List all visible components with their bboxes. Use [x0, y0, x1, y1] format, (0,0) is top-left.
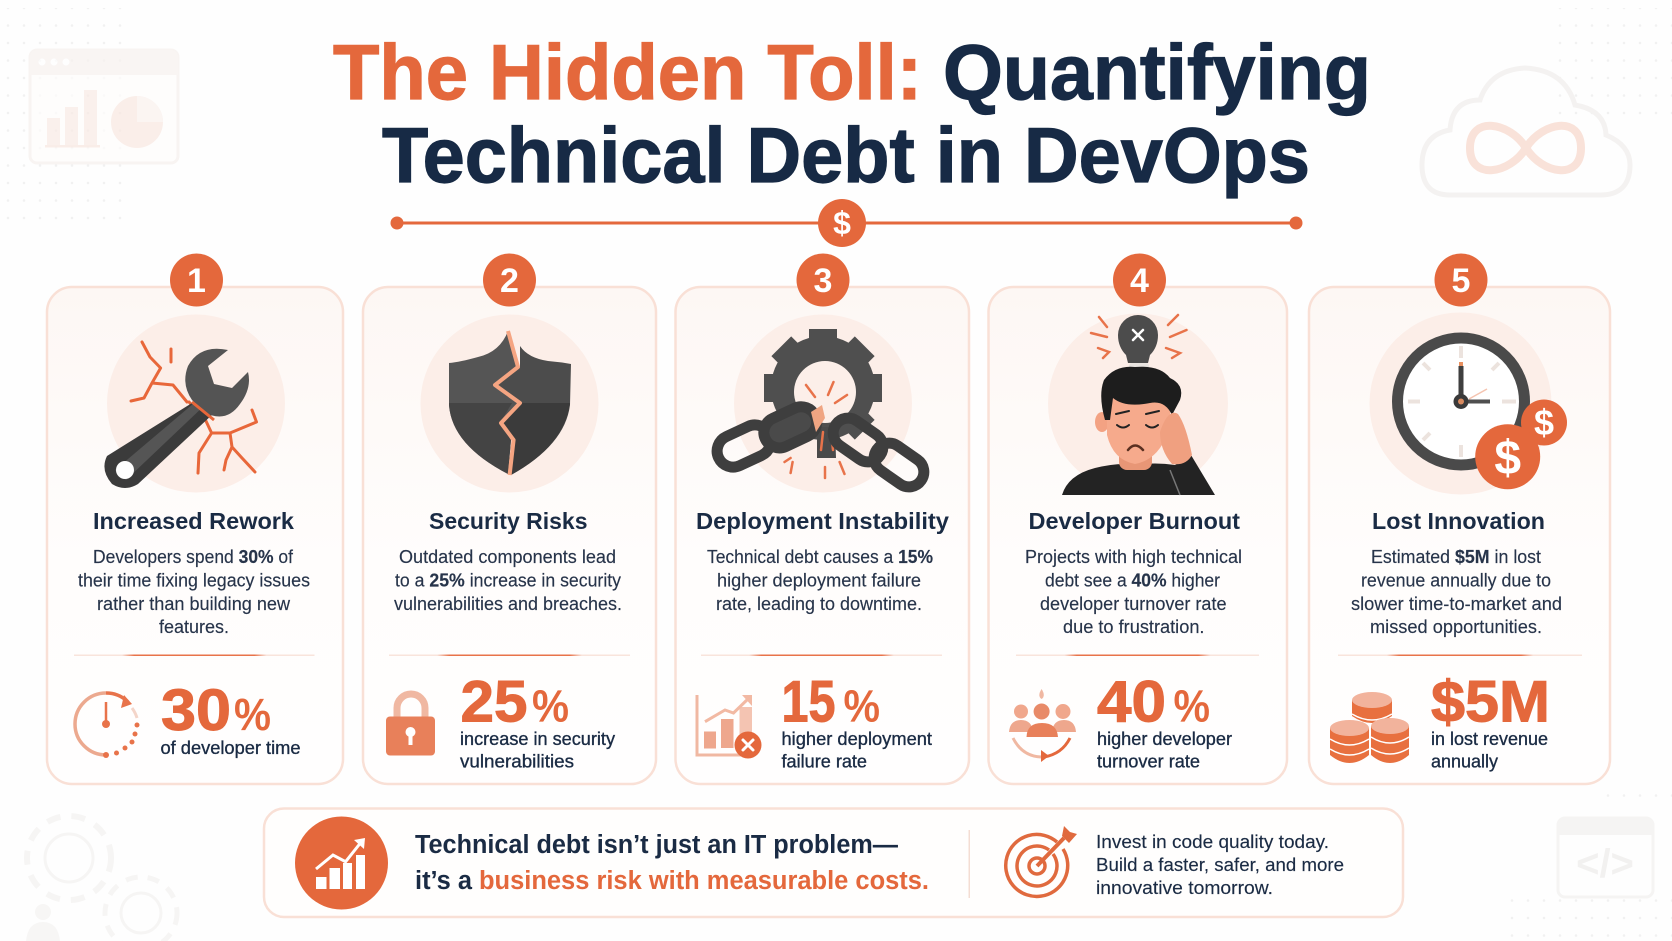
background icon: code window [1558, 818, 1653, 897]
icon: target with arrow [1006, 826, 1077, 896]
number badge 2: 2 [500, 262, 519, 300]
description: rate, leading to downtime. [716, 593, 922, 614]
description: higher deployment failure [717, 570, 921, 590]
stat: 40%: higher developer [1097, 728, 1232, 749]
panel: security risks [363, 254, 656, 784]
number badge 4: 4 [1130, 262, 1149, 300]
stat: 30%: of developer time [160, 737, 300, 758]
background icon: dashboard window [30, 50, 178, 163]
description [1351, 546, 1562, 637]
icon: clock with dollar coins [1370, 312, 1567, 494]
icon: gear with broken chain [712, 314, 930, 493]
heading: Increased Rework [93, 508, 295, 534]
heading: Deployment Instability [696, 508, 949, 534]
description: Estimated $5M in lost [1371, 546, 1541, 567]
call to action: Invest in code quality today. [1096, 831, 1329, 852]
number badge 1 [170, 254, 223, 306]
number badge 2 [483, 254, 536, 306]
title: Quantifying [943, 28, 1371, 116]
description: their time fixing legacy issues [78, 570, 310, 590]
stat: 25%: vulnerabilities [460, 750, 574, 772]
description: to a 25% increase in security [395, 570, 622, 590]
description [78, 546, 310, 637]
panel: developer burnout [988, 254, 1287, 784]
stat: 30%: % [234, 689, 271, 740]
number badge 5 [1434, 254, 1488, 306]
stat: 25%: increase in security [460, 728, 616, 749]
stat: 40%: % [1174, 680, 1210, 732]
number badge 3: 3 [814, 262, 832, 300]
number badge 1: 1 [187, 262, 206, 300]
takeaway message: Technical debt isn’t just an IT problem— [415, 831, 898, 859]
call to action: Build a faster, safer, and more [1096, 854, 1344, 875]
description: Outdated components lead [399, 546, 616, 567]
description: Developers spend 30% of [93, 546, 294, 567]
description: vulnerabilities and breaches. [394, 593, 622, 614]
icon: burnt out developer with bulb [1048, 314, 1228, 495]
stat: 25% [460, 670, 616, 772]
takeaway message: business risk with measurable costs. [479, 867, 929, 895]
stat: $5M: annually [1431, 750, 1499, 772]
background icon: cloud with infinity loop [1422, 68, 1630, 195]
description: features. [159, 616, 229, 637]
title divider with dollar badge: $ [833, 205, 851, 241]
icon: padlock [386, 694, 435, 756]
title: Technical Debt in DevOps [382, 111, 1310, 199]
description: due to frustration. [1063, 616, 1204, 637]
icon: cracked wrench [104, 314, 285, 492]
description: Technical debt causes a 15% [707, 546, 933, 567]
takeaway message: it’s a [415, 867, 473, 895]
panel: deployment instability [676, 254, 969, 784]
icon: growth chart badge [295, 816, 388, 910]
stat: 15%: % [844, 680, 880, 732]
icon: stopwatch [75, 693, 140, 758]
stat: 15% [782, 670, 932, 772]
description: revenue annually due to [1361, 570, 1551, 590]
takeaway message [415, 831, 929, 895]
icon: clock with dollar coins: $ [1534, 402, 1554, 443]
panel: increased rework [47, 254, 343, 784]
stat: 15%: 15 [782, 670, 836, 734]
icon: failing bar chart [697, 695, 762, 758]
description: missed opportunities. [1370, 616, 1542, 637]
description [707, 546, 933, 614]
icon: team turnover [1009, 689, 1076, 762]
call to action: innovative tomorrow. [1096, 877, 1273, 898]
stat: $5M [1431, 670, 1550, 772]
stat: 40%: 40 [1097, 670, 1166, 734]
number badge 5: 5 [1452, 262, 1470, 300]
number badge 3 [796, 254, 850, 306]
heading: Developer Burnout [1028, 508, 1240, 534]
icon: coin stacks [1330, 692, 1409, 763]
background icon: gears [26, 816, 177, 941]
description: Projects with high technical [1025, 546, 1242, 567]
title [333, 28, 1371, 199]
stat: 15%: higher deployment [782, 728, 932, 749]
stat: 25%: 25 [460, 670, 528, 734]
background icon: code window: </> [1576, 842, 1634, 886]
title divider with dollar badge [390, 199, 1302, 247]
heading: Security Risks [429, 508, 588, 534]
stat: 40%: turnover rate [1097, 750, 1200, 772]
description: rather than building new [97, 593, 291, 614]
stat: 15%: failure rate [782, 750, 867, 772]
icon: clock with dollar coins: $ [1494, 432, 1521, 485]
panel: bottom takeaway banner [264, 808, 1403, 917]
icon: cracked shield [420, 314, 598, 492]
call to action [1096, 831, 1344, 898]
panel: lost innovation [1309, 254, 1610, 784]
stat: 30% [160, 678, 300, 758]
number badge 4 [1113, 254, 1166, 306]
stat: $5M: in lost revenue [1431, 728, 1548, 749]
description: slower time-to-market and [1351, 593, 1562, 614]
title: The Hidden Toll: [333, 28, 922, 116]
stat: 30%: 30 [161, 678, 231, 743]
heading: Lost Innovation [1372, 508, 1545, 534]
description: debt see a 40% higher [1045, 570, 1220, 590]
description [1025, 546, 1242, 637]
stat: 25%: % [532, 680, 569, 732]
stat: 40% [1097, 670, 1232, 772]
description: developer turnover rate [1040, 593, 1226, 614]
description [394, 546, 622, 614]
stat: $5M: $5M [1431, 670, 1550, 734]
